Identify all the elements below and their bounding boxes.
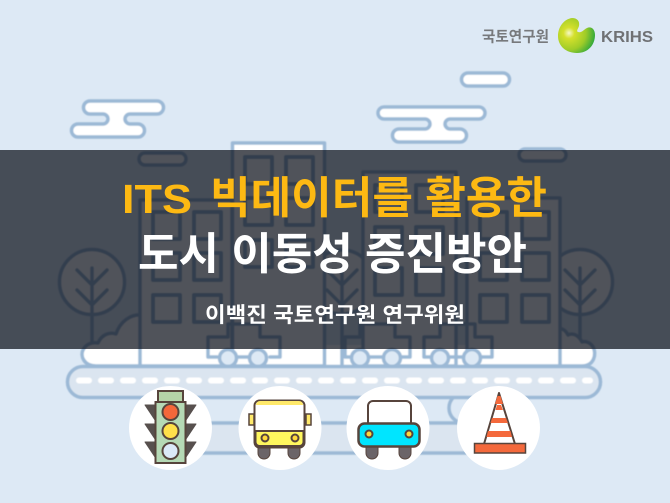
title line 1: 빅데이터를 활용한 [210, 174, 547, 223]
lower road [190, 423, 520, 453]
icon: traffic light [129, 386, 212, 470]
main road [68, 366, 600, 398]
cloud: top left [72, 101, 164, 137]
cloud: top right [378, 107, 485, 142]
organisation name: 국토연구원 [482, 28, 549, 46]
tree left [60, 250, 124, 366]
white ground [100, 345, 580, 367]
logo mark [558, 18, 595, 53]
dark title band [0, 150, 670, 349]
car outline 1 [208, 324, 280, 366]
building D [467, 198, 560, 366]
cloud: small pill top [462, 73, 510, 86]
title line 2: 도시 이동성 증진방안 [138, 230, 527, 279]
icon: car [346, 386, 430, 470]
tree center [310, 250, 374, 366]
city scene [60, 73, 612, 453]
building B [232, 143, 324, 366]
cloud: pill left [139, 153, 186, 165]
building A [140, 200, 232, 366]
icon: traffic cone [457, 386, 540, 470]
logo wordmark: KRIHS [601, 29, 653, 46]
road bend [449, 393, 520, 423]
bush left [82, 315, 142, 366]
car outline 2 [345, 324, 410, 366]
bush right [523, 328, 595, 366]
road dashes [79, 378, 590, 384]
author: 이백진 국토연구원 연구위원 [205, 304, 465, 327]
icon: bus [238, 386, 322, 470]
cloud: pill right [519, 149, 566, 161]
building C [363, 172, 456, 366]
tree right [548, 250, 612, 366]
organisation logo [482, 18, 653, 53]
car outline 3 [424, 324, 492, 366]
title line 1: ITS [122, 176, 192, 222]
